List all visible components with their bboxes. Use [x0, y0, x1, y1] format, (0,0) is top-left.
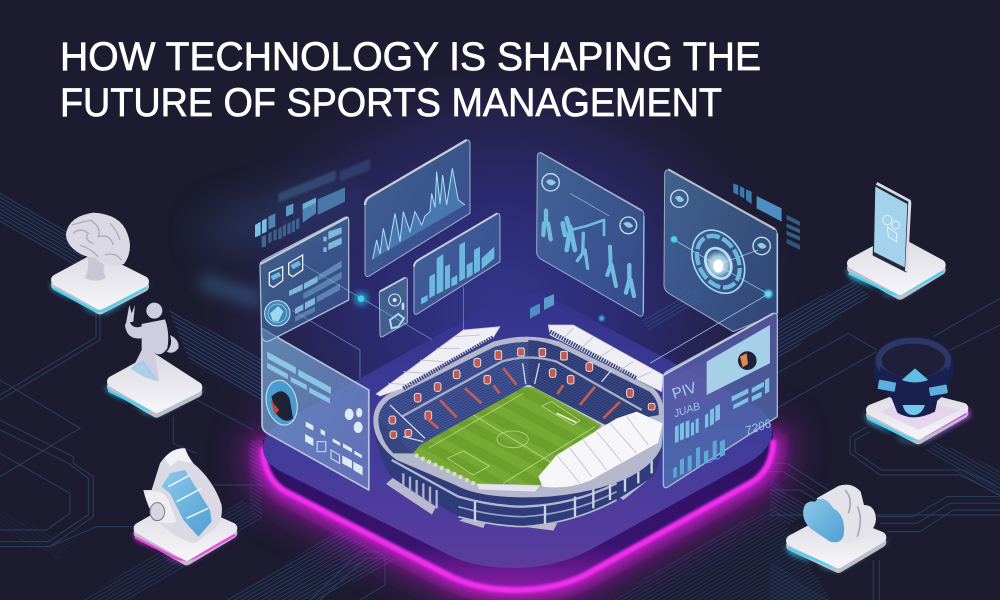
panel: player silhouettes: [537, 152, 644, 316]
stadium: left upper roof: [376, 327, 500, 396]
title: HOW TECHNOLOGY IS SHAPING THE: [60, 35, 761, 79]
right floating data blocks: [530, 183, 800, 321]
goggles icon: [873, 337, 954, 417]
stadium: plinths: [386, 476, 647, 531]
pedestal: cloud: [786, 485, 887, 570]
pedestal: phone: [847, 182, 945, 297]
panel: right lower dashboard: 7206: [743, 416, 773, 438]
panel: right lower dashboard: JUAB: [671, 400, 702, 420]
title: [60, 35, 761, 125]
bottom circuit traces: [310, 490, 1000, 600]
pedestal: machine: [133, 448, 237, 563]
right circuit traces: [760, 298, 1000, 600]
pedestal: goggles: [865, 337, 969, 443]
connector lines and node: [292, 264, 463, 378]
phone icon: [873, 182, 911, 272]
light beams: [200, 180, 350, 306]
panel: line chart: [365, 140, 470, 276]
brain icon: [66, 213, 130, 281]
circuit hatch bands: [0, 192, 1000, 600]
stadium: outer wall: [373, 417, 664, 527]
panel: upper-left dashboard: [260, 217, 349, 341]
panel: bar chart: [414, 213, 500, 314]
stadium: [373, 325, 664, 531]
panel: small gauges: [379, 278, 407, 337]
stadium: front white roof: [538, 412, 663, 488]
stadium: red seat markers: [389, 348, 655, 438]
athlete icon: [125, 303, 179, 382]
platform: base side: [263, 430, 773, 590]
machine icon: [143, 448, 222, 543]
platform: neon edge: [263, 440, 773, 590]
stadium: bowl rim: [373, 337, 664, 497]
player figures: [543, 211, 634, 296]
panel: right lower dashboard: [663, 313, 777, 488]
lens rings: [681, 221, 755, 302]
stadium: right upper roof: [548, 325, 663, 392]
pedestal: athlete: [106, 303, 204, 414]
title: FUTURE OF SPORTS MANAGEMENT: [60, 81, 722, 125]
platform: magenta neon glow: [263, 440, 773, 590]
floating data blocks: [255, 158, 370, 247]
avatar: [262, 377, 301, 428]
stadium: stands: [378, 340, 659, 453]
panel: radar lens: [650, 169, 777, 363]
platform: top surface: [263, 293, 772, 568]
pedestal: brain: [50, 213, 150, 313]
platform: [263, 293, 773, 590]
left circuit traces: [0, 312, 263, 547]
panel: right lower dashboard: PIV: [670, 379, 699, 403]
panel: lower-left dashboard: [262, 328, 369, 490]
cloud icon: [803, 485, 876, 544]
stadium: pitch: [414, 387, 602, 492]
